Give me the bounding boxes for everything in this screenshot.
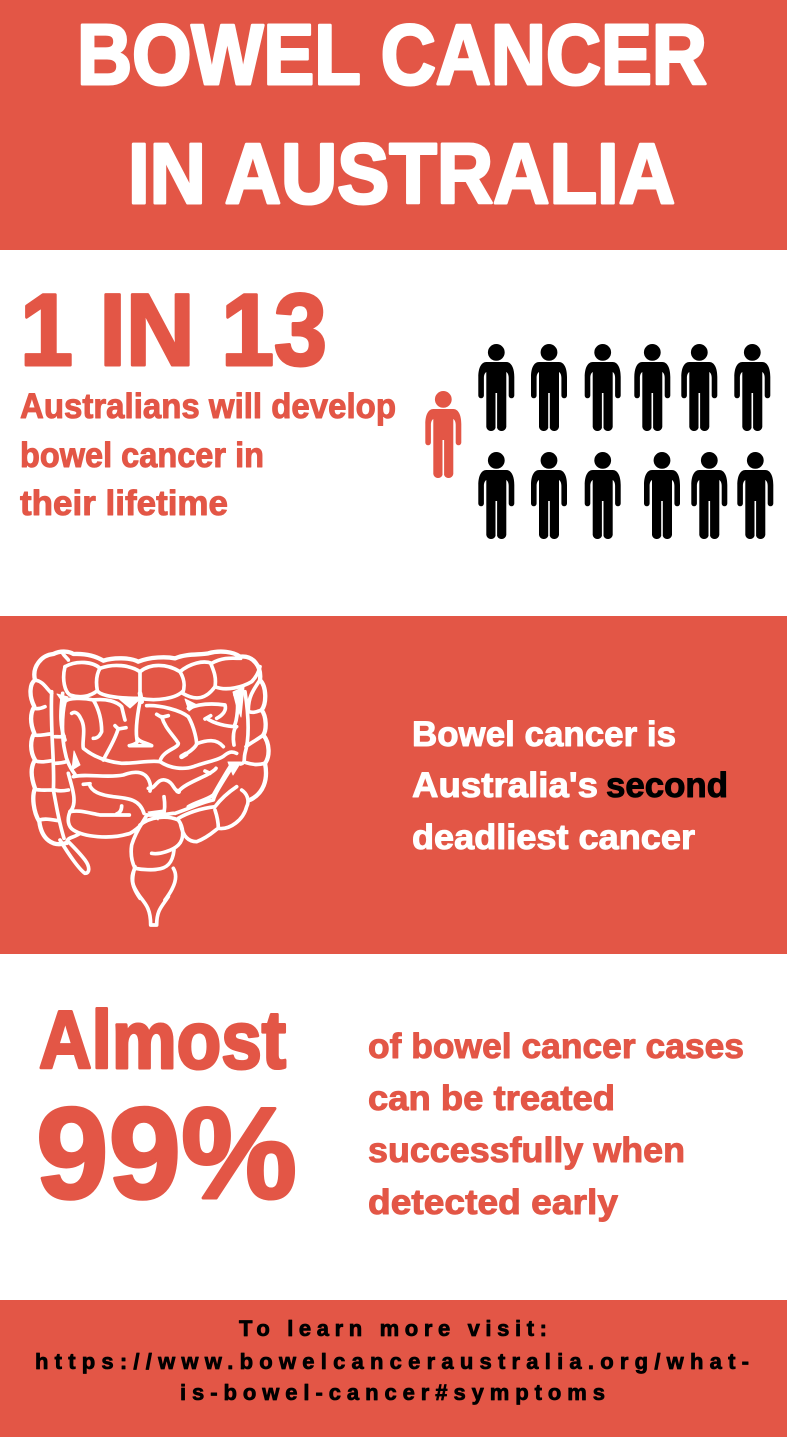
text block: early detection [368,1027,744,1222]
panel: second deadliest cancer [0,616,787,954]
text block: learn more link [35,1316,749,1405]
panel: 1 in 13 statistic [20,273,773,539]
title: IN AUSTRALIA [128,127,675,222]
text block: lifetime risk: Australians will develop [20,387,396,426]
text block: second deadliest: second [606,766,728,805]
text block: lifetime risk [20,387,396,523]
text block: lifetime risk: bowel cancer in [20,436,264,475]
panel: footer call to action [0,1300,787,1437]
text block: second deadliest: deadliest cancer [412,818,695,857]
icon: bowel outline [30,652,269,925]
title: BOWEL CANCER [77,8,707,103]
text block: early detection: can be treated [368,1079,615,1118]
text block: second deadliest: Australia's [412,766,598,805]
text block: early detection: detected early [368,1183,619,1222]
text block: learn more link: https://www.bowelcanceraustralia.org/what- [35,1349,749,1374]
big number: almost 99%: Almost [39,995,286,1086]
big number: almost 99% [36,995,297,1226]
text block: learn more link: To learn more visit: [239,1316,547,1341]
icon group: twelve black people [478,344,773,539]
text block: lifetime risk: their lifetime [20,484,228,523]
text block: second deadliest: Bowel cancer is [412,715,676,754]
text block: early detection: of bowel cancer cases [368,1027,744,1066]
panel: almost 99% statistic [36,995,744,1226]
text block: early detection: successfully when [368,1131,685,1170]
big number: almost 99%: 99% [36,1080,297,1226]
big number: 1 in 13: 1 IN 13 [20,273,327,387]
icon: highlighted red person [425,391,461,478]
title [77,8,707,222]
text block: learn more link: is-bowel-cancer#symptoms [180,1380,605,1405]
text block: second deadliest [412,715,728,857]
panel: title banner [0,0,787,250]
